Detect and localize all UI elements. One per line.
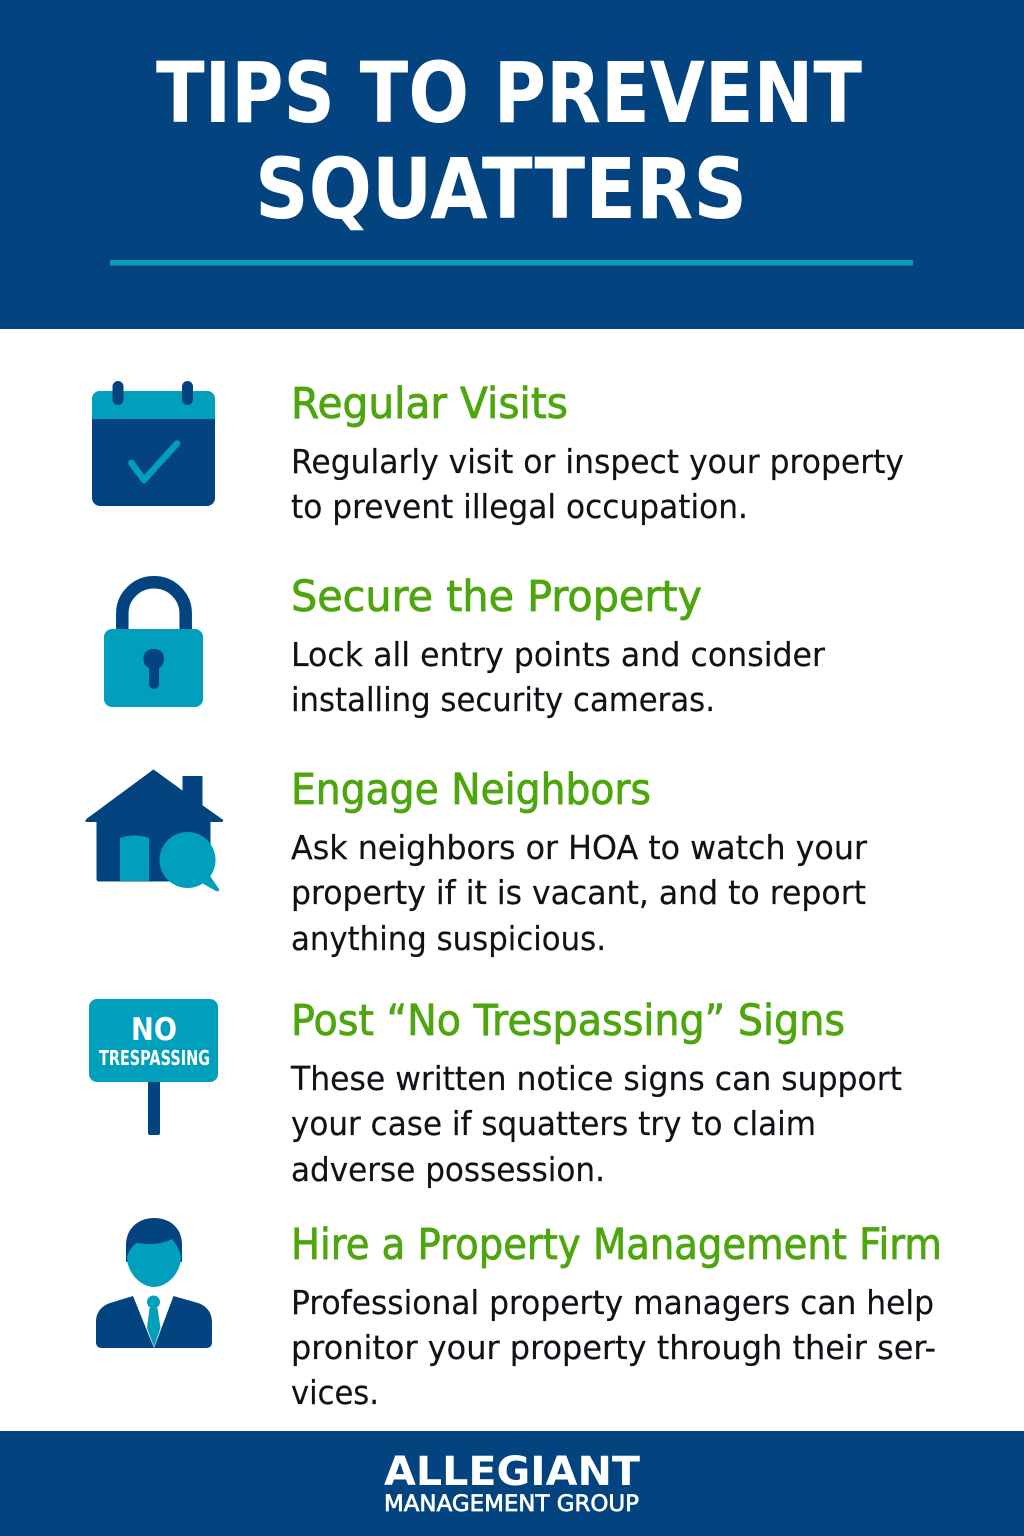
icon: no trespassing sign: TRESPASSING xyxy=(99,1046,210,1070)
text: post no trespassing signs xyxy=(290,1059,902,1189)
title: SQUATTERS xyxy=(255,140,747,238)
icon: businessman xyxy=(96,1218,212,1348)
text: post no trespassing signs: your case if squatters try to claim xyxy=(291,1104,816,1143)
heading: regular visits: Regular Visits xyxy=(291,379,568,429)
text: post no trespassing signs: adverse possession. xyxy=(291,1150,605,1189)
text: engage neighbors: property if it is vacant, and to report xyxy=(291,873,866,912)
text: secure the property xyxy=(291,635,825,719)
text: hire a property management firm: vices. xyxy=(291,1373,379,1412)
text: hire a property management firm: Professional property managers can help xyxy=(291,1283,934,1322)
text: hire a property management firm xyxy=(291,1283,936,1412)
title xyxy=(156,44,862,238)
tip 2: secure the property xyxy=(104,572,825,719)
tip 4: no trespassing signs xyxy=(89,996,902,1189)
text: engage neighbors: Ask neighbors or HOA to watch your xyxy=(291,828,867,867)
icon: no trespassing sign xyxy=(89,999,218,1135)
logo: allegiant management group xyxy=(384,1449,641,1517)
footer banner xyxy=(0,1431,1024,1536)
text: regular visits xyxy=(291,442,904,526)
icon: no trespassing sign: NO xyxy=(131,1012,177,1048)
icon: calendar with check mark xyxy=(92,381,215,506)
tip 1: regular visits xyxy=(92,379,904,526)
logo: allegiant management group: MANAGEMENT GROUP xyxy=(384,1492,639,1517)
heading: hire a property management firm: Hire a Property Management Firm xyxy=(291,1220,942,1270)
tip 5: hire a property management firm xyxy=(96,1218,942,1412)
title: TIPS TO PREVENT xyxy=(156,44,862,142)
tip 3: engage neighbors xyxy=(86,765,867,958)
text: regular visits: to prevent illegal occupation. xyxy=(291,487,748,526)
icon: house with speech bubble xyxy=(86,770,223,891)
text: regular visits: Regularly visit or inspect your property xyxy=(291,442,904,481)
text: secure the property: Lock all entry points and consider xyxy=(291,635,825,674)
heading: post no trespassing signs: Post “No Trespassing” Signs xyxy=(291,996,845,1046)
text: secure the property: installing security cameras. xyxy=(291,680,715,719)
text: engage neighbors: anything suspicious. xyxy=(291,919,606,958)
text: post no trespassing signs: These written notice signs can support xyxy=(290,1059,902,1098)
heading: secure the property: Secure the Property xyxy=(291,572,702,622)
icon: padlock xyxy=(104,582,203,707)
text: hire a property management firm: pronitor your property through their ser- xyxy=(291,1328,936,1367)
logo: allegiant management group: ALLEGIANT xyxy=(384,1449,641,1495)
header banner xyxy=(0,0,1024,329)
text: engage neighbors xyxy=(291,828,867,958)
heading: engage neighbors: Engage Neighbors xyxy=(291,765,651,815)
